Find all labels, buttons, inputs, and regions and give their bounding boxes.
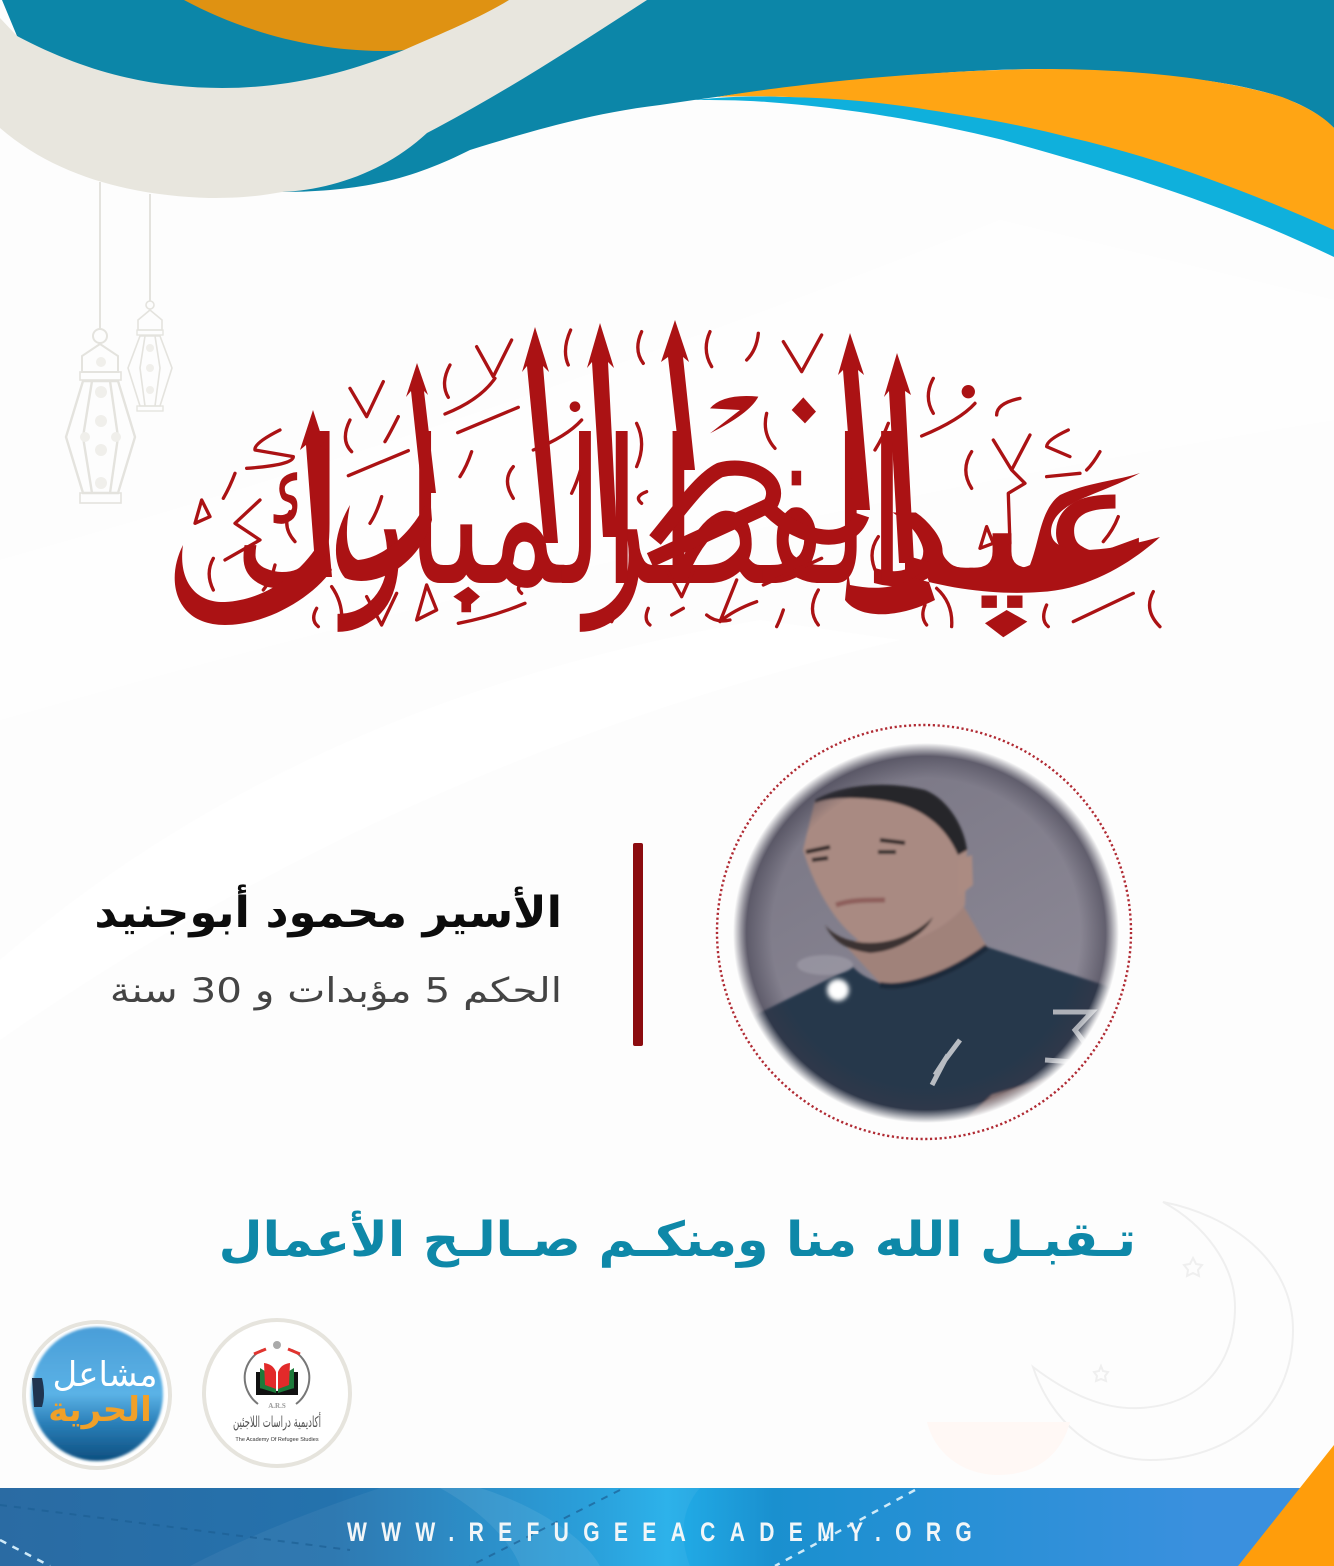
icon: crescent moon [1033,1202,1293,1460]
star small [1094,1366,1108,1381]
icon: open book [245,1341,309,1404]
faint half circle [927,1422,1070,1475]
footer swoosh [440,1488,600,1566]
calligraphy swashes [175,473,1160,625]
photo content [734,744,1118,1122]
footer band [0,1445,1334,1566]
calligraphy: Eid al-Fitr al-Mubarak: المبارك [234,398,640,631]
calligraphy: Eid al-Fitr al-Mubarak: الفطر [580,397,905,633]
logo: Mashael al-Hurriya [24,1322,170,1468]
orange wave top [184,0,509,51]
logo: Academy of Refugee Studies [204,1320,350,1466]
orange corner [1238,1445,1334,1566]
calligraphy ornaments right [667,332,1160,637]
logo: Mashael al-Hurriya: الحرية [48,1390,152,1430]
website address: WWW.REFUGEEACADEMY.ORG [347,1518,972,1548]
academy Arabic name: أكاديمية دراسات اللاجئين [233,1412,321,1431]
calligraphy: Eid al-Fitr al-Mubarak: عيد [861,426,1160,624]
icon: lanterns [66,182,172,503]
calligraphy: Eid al-Fitr al-Mubarak [175,320,1160,637]
calligraphy ornaments left [195,330,650,627]
background sweeps [0,220,1334,1040]
calligraphy tall flourishes [300,320,914,577]
orange wave right [716,69,1334,230]
top wave banner [0,0,1334,257]
prisoner name: الأسير محمود أبوجنيد [94,884,562,938]
logo: Mashael al-Hurriya: مشاعل [53,1355,157,1395]
academy English name: The Academy Of Refugee Studies [235,1437,319,1443]
footer dashes [0,1490,915,1566]
tagline: تـقبـل الله منا ومنكـم صـالـح الأعمال [219,1209,1136,1269]
portrait photo [717,725,1140,1139]
star [1184,1258,1202,1276]
divider bar [633,843,643,1046]
cream wave [0,0,647,198]
academy initials: A.R.S [268,1402,286,1410]
sentence text: الحكم 5 مؤبدات و 30 سنة [110,970,562,1011]
blue ribbon [694,96,1334,257]
dotted ring [717,725,1131,1139]
